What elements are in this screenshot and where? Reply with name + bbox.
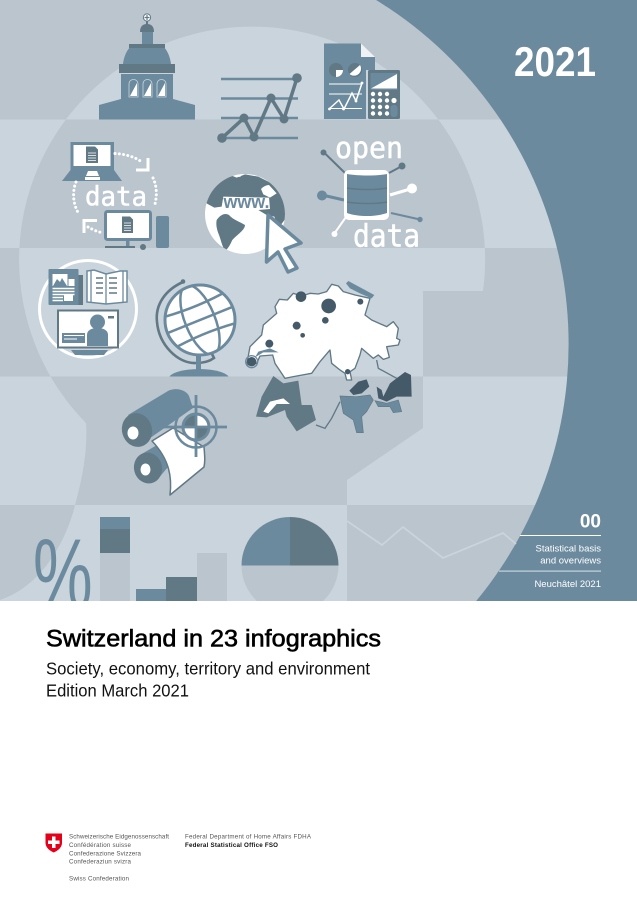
pie chart <box>242 517 338 601</box>
label: data: data <box>353 218 420 254</box>
subtitle: Edition March 2021 <box>46 680 189 700</box>
Swiss Confederation names: Confederaziun svizra <box>69 858 132 866</box>
city markers <box>247 291 363 374</box>
year 2021: 2021 <box>514 38 596 85</box>
series title <box>536 544 601 566</box>
map region: Valais and Vaud <box>256 376 316 431</box>
South America <box>216 214 245 251</box>
Swiss Confederation names: Confederazione Svizzera <box>69 850 142 858</box>
map region: dark central <box>349 379 369 395</box>
icon: world globe on stand <box>155 279 236 376</box>
icon: report and calculator <box>324 44 400 119</box>
Swiss Confederation names <box>69 834 169 882</box>
department names: Federal Statistical Office FSO <box>185 842 278 849</box>
bar chart: three bars <box>136 553 227 601</box>
label: data: data <box>85 182 147 212</box>
line chart: background polyline <box>347 521 516 558</box>
place and year: Neuchâtel 2021 <box>534 579 601 590</box>
Swiss Confederation names: Swiss Confederation <box>69 876 130 882</box>
department names <box>185 834 312 849</box>
icon: cursor <box>266 215 301 272</box>
icon: open data database <box>317 131 423 254</box>
department names: Federal Department of Home Affairs FDHA <box>185 834 312 840</box>
series title: Statistical basis <box>536 544 601 554</box>
icon: data exchange between laptop and desktop <box>62 142 169 250</box>
icon: parliament building <box>99 14 195 119</box>
map region: white northern cantons <box>247 284 400 380</box>
label: open: open <box>335 131 403 165</box>
label: www: www. <box>223 192 270 212</box>
map region: Ticino <box>340 395 373 433</box>
lake Constance <box>346 281 374 298</box>
icon: www globe with cursor <box>205 169 301 272</box>
icon: Swiss shield <box>46 834 62 852</box>
percent sign: % <box>33 518 93 629</box>
subtitle <box>46 658 370 700</box>
title: Switzerland in 23 infographics <box>46 626 381 652</box>
icon: publications in circle <box>40 260 136 358</box>
lake in dark canton <box>263 398 290 413</box>
map region: Graubünden dark <box>377 372 412 402</box>
series number: 00 <box>580 512 601 532</box>
icon: target <box>164 395 227 457</box>
bar chart: stacked bar <box>100 517 130 601</box>
south outline of Switzerland <box>316 360 397 428</box>
northern landmass <box>206 174 285 224</box>
icon: paper rolls with target <box>118 389 227 495</box>
map region: Graubünden steel <box>375 400 402 413</box>
subtitle: Society, economy, territory and environment <box>46 658 370 678</box>
cover background panel <box>0 0 637 601</box>
Swiss Confederation names: Schweizerische Eidgenossenschaft <box>69 834 169 840</box>
series number block <box>499 512 601 590</box>
series title: and overviews <box>540 556 601 566</box>
map: Switzerland <box>246 281 412 433</box>
Swiss Confederation names: Confédération suisse <box>69 842 132 849</box>
icon: line chart <box>217 73 302 143</box>
lake Geneva <box>255 348 279 357</box>
